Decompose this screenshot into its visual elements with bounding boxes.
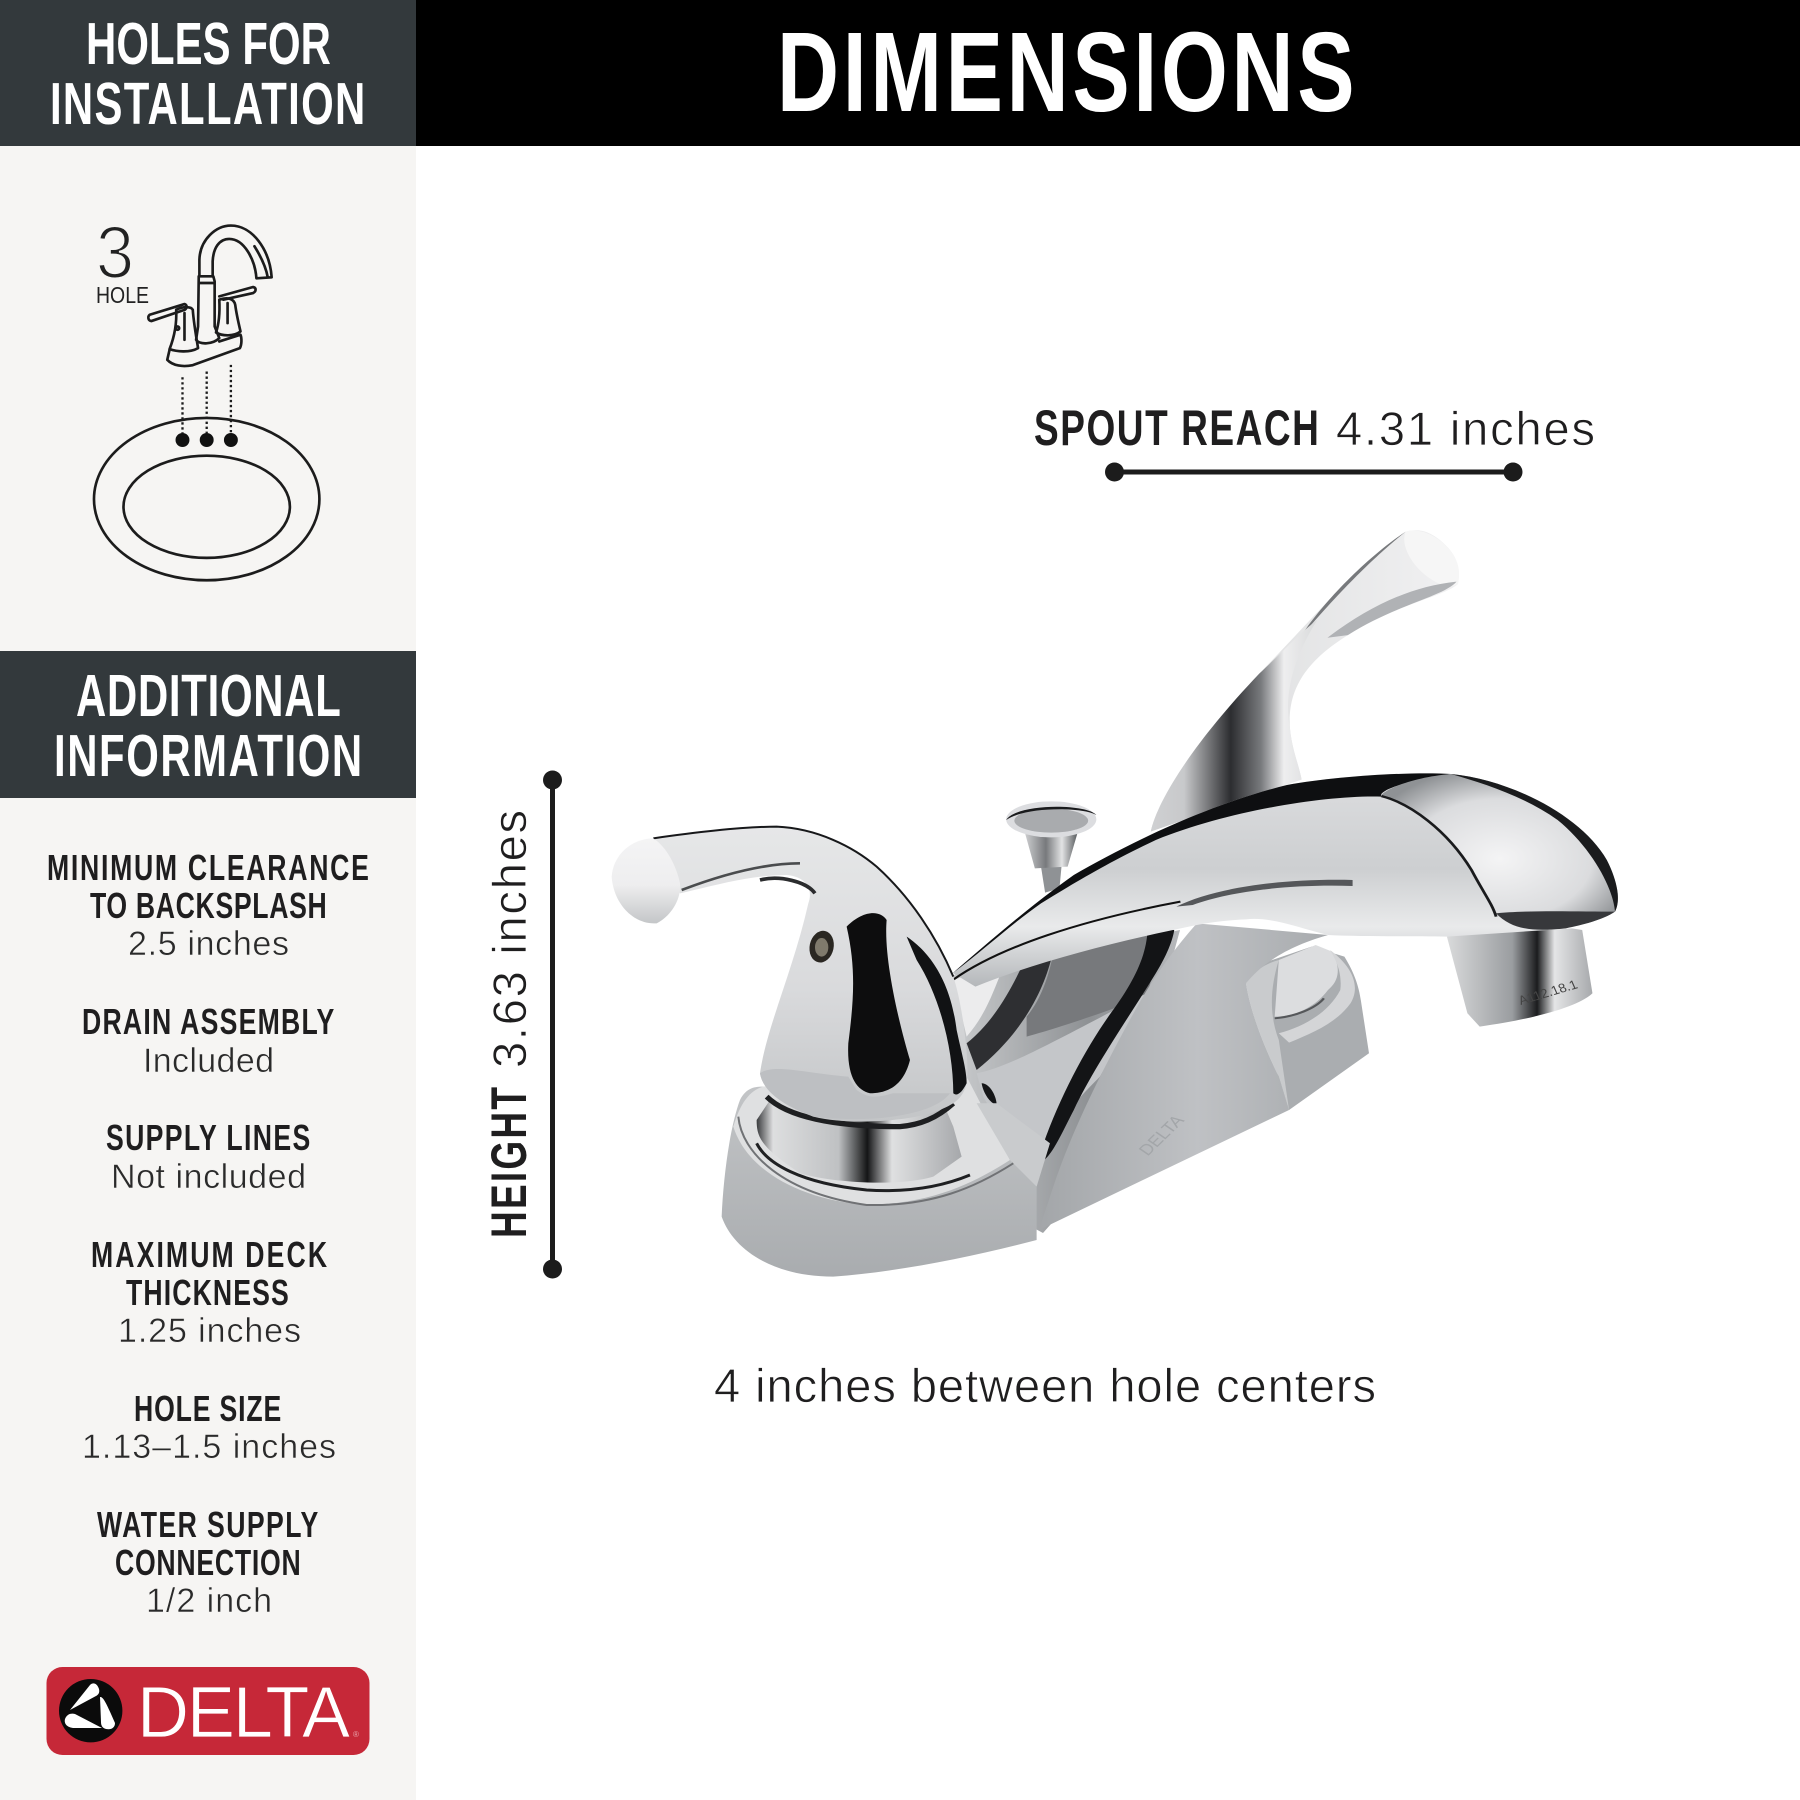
body backing: [953, 930, 1180, 1233]
spec: supply lines: SUPPLY LINES: [106, 1117, 310, 1158]
spec: minimum clearance: TO BACKSPLASH: [90, 885, 327, 926]
spec: hole size: HOLE SIZE: [134, 1388, 281, 1429]
icon label: 3 hole: HOLE: [96, 282, 149, 308]
spec: water supply connection: [97, 1504, 318, 1620]
spec: drain assembly: [82, 1001, 334, 1080]
dimension: spout reach: 4.31 inches: [1336, 402, 1595, 455]
spec: water supply connection: WATER SUPPLY: [97, 1504, 318, 1545]
spec: water supply connection: CONNECTION: [115, 1542, 301, 1583]
spec: minimum clearance: MINIMUM CLEARANCE: [47, 847, 369, 888]
dimension: spout reach: SPOUT REACH: [1034, 401, 1319, 456]
spout: [953, 773, 1618, 987]
spec: water supply connection: 1/2 inch: [146, 1582, 272, 1620]
dimension: spout reach: [1034, 401, 1595, 482]
pop-up knob: [1006, 801, 1096, 893]
icon label: 3 hole: 3: [96, 211, 134, 294]
spec: hole size: [82, 1388, 336, 1466]
spec: maximum deck thickness: MAXIMUM DECK: [91, 1234, 327, 1275]
logo: delta: ®: [353, 1730, 359, 1739]
body front: [1037, 923, 1328, 1230]
spec: hole size: 1.13–1.5 inches: [82, 1428, 336, 1466]
spec: drain assembly: Included: [143, 1042, 274, 1080]
icon: line art faucet and sink: [94, 226, 319, 580]
spec: supply lines: Not included: [111, 1158, 306, 1196]
icon: three hole sink diagram: [94, 211, 319, 580]
rear deck and handle base: [1246, 945, 1369, 1110]
spec: minimum clearance: [47, 847, 369, 963]
spec: minimum clearance: 2.5 inches: [128, 925, 289, 963]
heading: additional information: ADDITIONAL: [76, 663, 341, 729]
heading: holes for installation: HOLES FOR: [86, 11, 331, 77]
body interior: [953, 923, 1167, 1163]
aerator: [1447, 928, 1592, 1027]
dimension: height: HEIGHT: [482, 1087, 537, 1238]
dimension: height: 3.63 inches: [483, 810, 536, 1068]
heading: additional information: [0, 651, 416, 798]
body front: DELTA: [1134, 1111, 1189, 1159]
spec: maximum deck thickness: 1.25 inches: [118, 1312, 301, 1350]
spec: drain assembly: DRAIN ASSEMBLY: [82, 1001, 334, 1042]
spec: supply lines: [106, 1117, 310, 1196]
dimension: height: [482, 770, 562, 1278]
front handle neck: [757, 1097, 962, 1183]
heading: additional information: INFORMATION: [54, 723, 362, 789]
heading: holes for installation: INSTALLATION: [50, 71, 365, 137]
icon label: 3 hole: [96, 211, 149, 308]
logo: delta: [46, 1667, 370, 1755]
title bar: [416, 0, 1800, 146]
heading: holes for installation: [0, 0, 416, 146]
sidebar panel: [0, 0, 416, 1800]
logo: delta: DELTA: [137, 1673, 350, 1753]
rear handle: [1151, 530, 1459, 832]
title: DIMENSIONS: [777, 10, 1355, 136]
illustration: chrome faucet: [612, 530, 1618, 1277]
spec: maximum deck thickness: [91, 1234, 327, 1350]
spec: maximum deck thickness: THICKNESS: [126, 1272, 289, 1313]
caption: hole centers: 4 inches between hole centers: [714, 1359, 1376, 1412]
aerator: A112.18.1: [1516, 978, 1580, 1008]
front handle: [612, 827, 967, 1122]
front handle base: [722, 1077, 1050, 1277]
